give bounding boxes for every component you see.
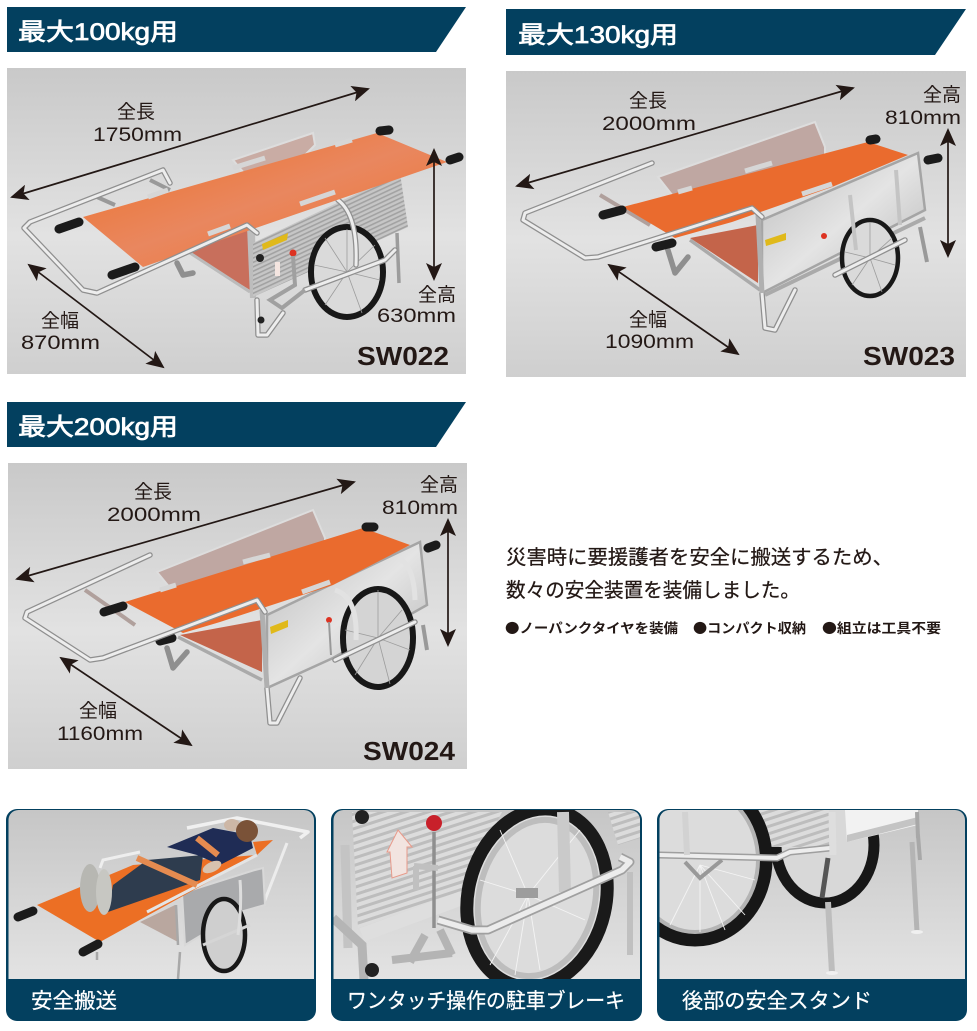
cart illustration SW024 (25, 510, 436, 723)
model: SW024: SW024 (363, 736, 456, 766)
label: length: 1750mm (93, 125, 182, 146)
product photo background (506, 71, 966, 377)
feature bullets (505, 617, 941, 637)
heading: 130kg (506, 9, 966, 55)
card: safe transport (6, 809, 316, 1021)
heading: 100kg (7, 7, 466, 52)
feature bullets: ●ノーパンクタイヤを装備 (505, 617, 679, 637)
panel: SW024 up to 200kg (7, 402, 467, 769)
label: width: 全幅 (629, 309, 667, 331)
label: length: 2000mm (602, 114, 696, 135)
cart illustration SW022 (24, 130, 459, 335)
photo: rear stand close-up (660, 810, 923, 975)
photo: brake and wheel close-up (334, 810, 640, 979)
label: length (93, 101, 182, 146)
feature bullets: ●コンパクト収納 (693, 617, 806, 637)
label: width: 870mm (21, 333, 100, 354)
label: length (107, 481, 201, 526)
text block: description: 災害時に要援護者を安全に搬送するため、 (506, 546, 893, 569)
heading: 200kg (7, 402, 466, 447)
label: height (382, 474, 458, 519)
label: length: 2000mm (107, 505, 201, 526)
card: rear safety stand (657, 809, 967, 1021)
label: height (885, 84, 961, 129)
label: width (57, 700, 143, 745)
card: one-touch parking brake (331, 795, 642, 1021)
product photo background (7, 68, 466, 374)
arrow: width (609, 265, 738, 354)
label: length: 全長 (134, 481, 172, 503)
label: height: 810mm (382, 498, 458, 519)
label: width: 全幅 (41, 310, 79, 332)
feature bullets: ●組立は工具不要 (822, 617, 941, 637)
arrow: height (947, 130, 949, 256)
arrow: height (433, 150, 435, 279)
label: width (21, 310, 100, 354)
label: width (605, 309, 694, 353)
product photo background (8, 463, 467, 769)
arrow: length (17, 482, 354, 579)
label: height: 全高 (418, 284, 456, 306)
label: width: 全幅 (79, 700, 117, 722)
label: height: 全高 (923, 84, 961, 106)
arrow: width (61, 658, 191, 745)
panel: SW022 up to 100kg (7, 7, 466, 374)
caption: ワンタッチ操作の駐車ブレーキ (347, 990, 625, 1013)
text block: description (506, 546, 893, 602)
label: height: 全高 (420, 474, 458, 496)
photo: person on stretcher cart (18, 818, 308, 979)
arrow: width (29, 265, 163, 367)
arrow: length (517, 88, 853, 186)
heading: 100kg: 最大100kg用 (18, 19, 178, 46)
cart illustration SW023 (523, 122, 938, 330)
panel: SW023 up to 130kg (506, 9, 966, 377)
label: length (602, 90, 696, 135)
label: width: 1160mm (57, 724, 143, 745)
caption: 安全搬送 (31, 990, 117, 1013)
text block: description: 数々の安全装置を装備しました。 (506, 579, 800, 602)
model: SW023: SW023 (863, 341, 955, 371)
heading: 200kg: 最大200kg用 (18, 414, 178, 441)
label: height: 630mm (377, 306, 456, 327)
caption: 後部の安全スタンド (682, 990, 872, 1013)
label: length: 全長 (629, 90, 667, 112)
arrow: length (12, 89, 368, 197)
arrow: height (447, 520, 449, 645)
label: height (377, 284, 456, 327)
model: SW022: SW022 (357, 341, 449, 371)
label: height: 810mm (885, 108, 961, 129)
label: width: 1090mm (605, 332, 694, 353)
label: length: 全長 (117, 101, 155, 123)
heading: 130kg: 最大130kg用 (518, 22, 678, 49)
